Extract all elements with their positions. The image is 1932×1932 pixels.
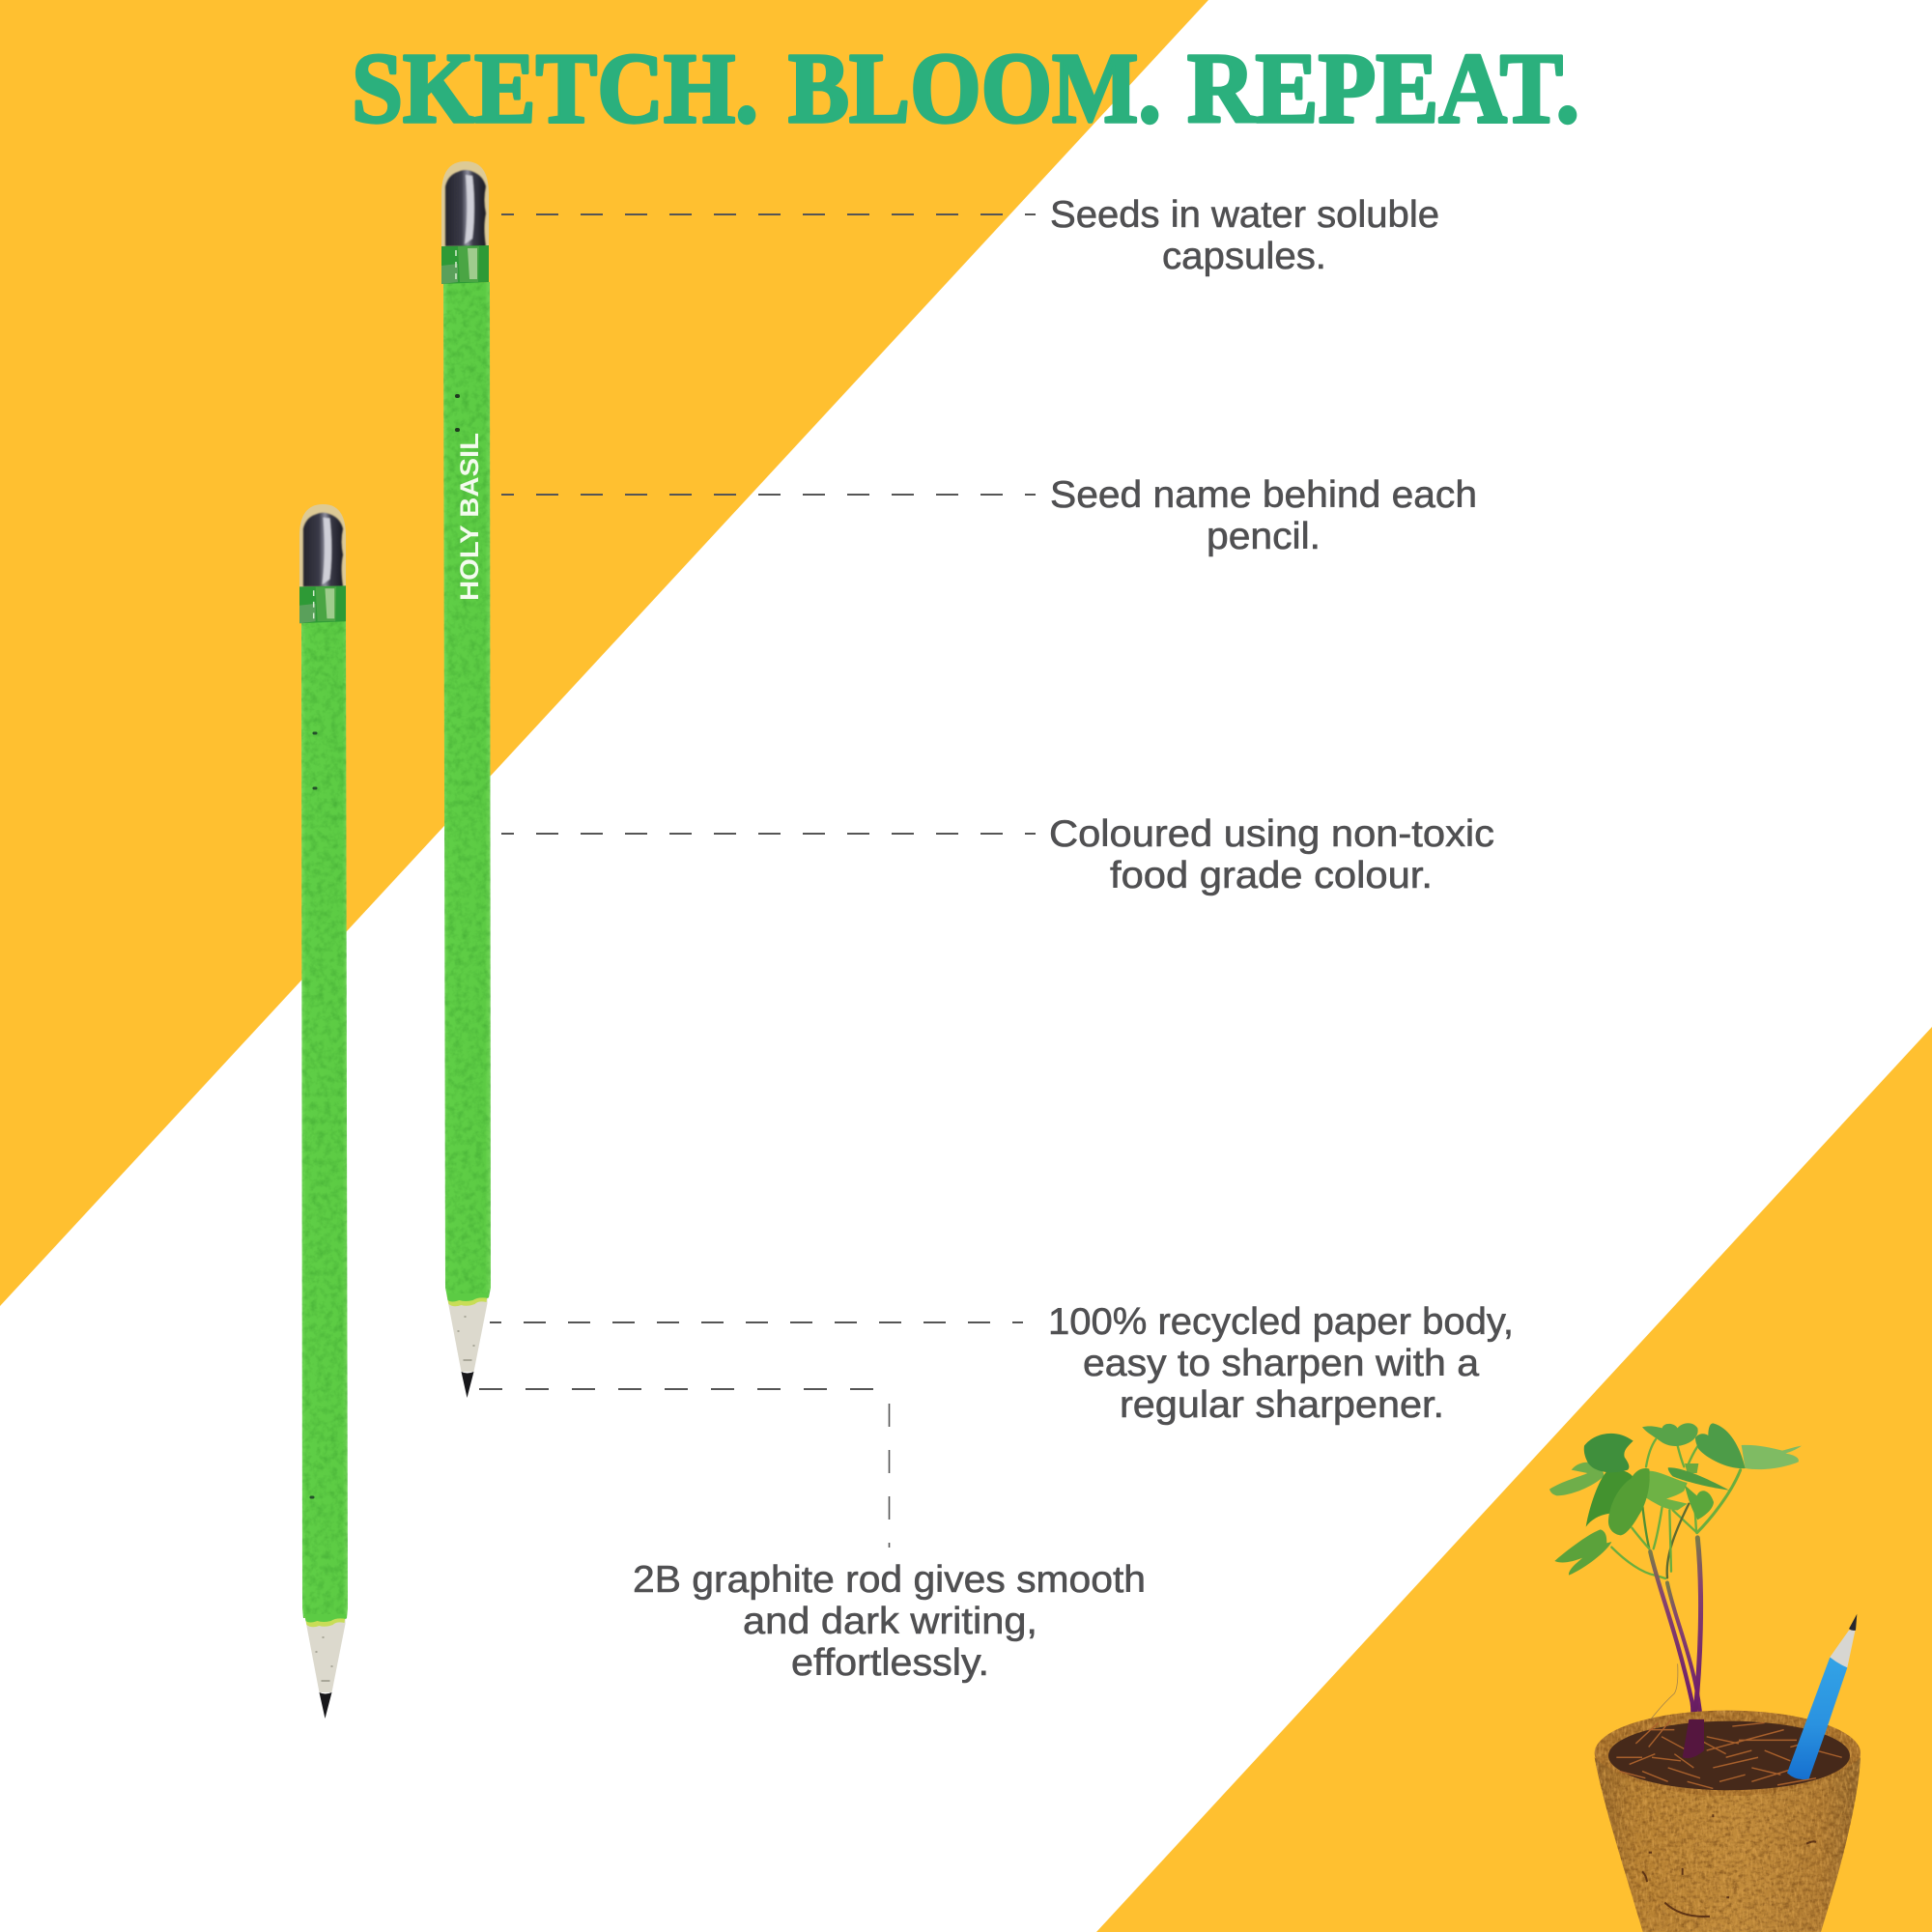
leader line: graphite vertical: [889, 1404, 891, 1548]
leaf: [1584, 1434, 1634, 1472]
specks: [457, 396, 458, 430]
leaf: [1642, 1423, 1698, 1446]
callout: seeds in capsules: [1050, 194, 1439, 277]
seed capsule: [299, 504, 346, 623]
leader line: colour: [501, 833, 1036, 835]
leaf: [1554, 1529, 1611, 1576]
leaf stalks: [1611, 1439, 1741, 1578]
coir pot back rim and soil: [1595, 1711, 1861, 1796]
callout: recycled paper body: regular sharpener.: [1120, 1384, 1444, 1426]
small blue pencil planted in pot: [1787, 1614, 1857, 1779]
callout: seeds in capsules: Seeds in water soluble: [1050, 194, 1439, 236]
title word: sketch: SKETCH.: [352, 33, 758, 144]
pot, stems and small pencil: [1595, 1538, 1861, 1932]
leaf: [1685, 1463, 1698, 1473]
callout: recycled paper body: [1048, 1301, 1514, 1426]
title: [352, 33, 1579, 144]
leader line: recycled body: [490, 1321, 1023, 1323]
seed name on pencil: HOLY BASIL: [455, 433, 484, 601]
callout: recycled paper body: easy to sharpen with a: [1083, 1343, 1480, 1384]
callout: seed name: pencil.: [1207, 516, 1321, 557]
callout: graphite rod: effortlessly.: [791, 1642, 989, 1684]
callout: non-toxic colour: Coloured using non-toxic: [1049, 813, 1494, 855]
leaf: [1742, 1445, 1802, 1469]
leaf: [1668, 1467, 1729, 1491]
leaf: [1549, 1463, 1604, 1495]
pencil: left plain pencil: [299, 504, 348, 1719]
callout: graphite rod: [633, 1559, 1146, 1684]
pencil body: [301, 621, 348, 1618]
leader line: graphite horizontal: [479, 1388, 873, 1390]
callout: seed name: Seed name behind each: [1050, 474, 1477, 516]
background: bottom right yellow triangle: [1096, 1027, 1932, 1932]
plant stem base in soil: [1683, 1719, 1704, 1758]
coir pot body: [1595, 1757, 1861, 1932]
pencil: right labelled pencil: [441, 161, 491, 1398]
specks: [311, 733, 316, 1497]
callout: seeds in capsules: capsules.: [1162, 236, 1326, 277]
title word: bloom: BLOOM.: [788, 33, 1161, 144]
plant stems: [1634, 1538, 1702, 1757]
leaf: [1608, 1468, 1650, 1535]
illustration: sprouting plant in coir pot: [1549, 1423, 1861, 1932]
leaf: [1645, 1471, 1688, 1510]
leaf: [1685, 1485, 1714, 1520]
sharpened tip: [305, 1614, 346, 1719]
callout: non-toxic colour: [1049, 813, 1494, 896]
callout: recycled paper body: 100% recycled paper body,: [1048, 1301, 1514, 1343]
leader line: seed name: [501, 494, 1036, 496]
pot surface flecks: [1642, 1814, 1816, 1917]
plant foliage: [1549, 1423, 1802, 1578]
callout: non-toxic colour: food grade colour.: [1110, 855, 1433, 896]
title word: repeat: REPEAT.: [1187, 33, 1579, 144]
seed capsule: [441, 161, 489, 284]
leaf: [1695, 1423, 1746, 1468]
sharpened tip: [446, 1293, 489, 1398]
background: top left yellow triangle: [0, 0, 1208, 1306]
callout: seed name: [1050, 474, 1477, 557]
pencil body: [443, 282, 491, 1297]
leader line: seeds: [501, 213, 1036, 215]
callout: graphite rod: and dark writing,: [743, 1601, 1037, 1642]
callout: graphite rod: 2B graphite rod gives smooth: [633, 1559, 1146, 1601]
leaf: [1586, 1470, 1633, 1527]
